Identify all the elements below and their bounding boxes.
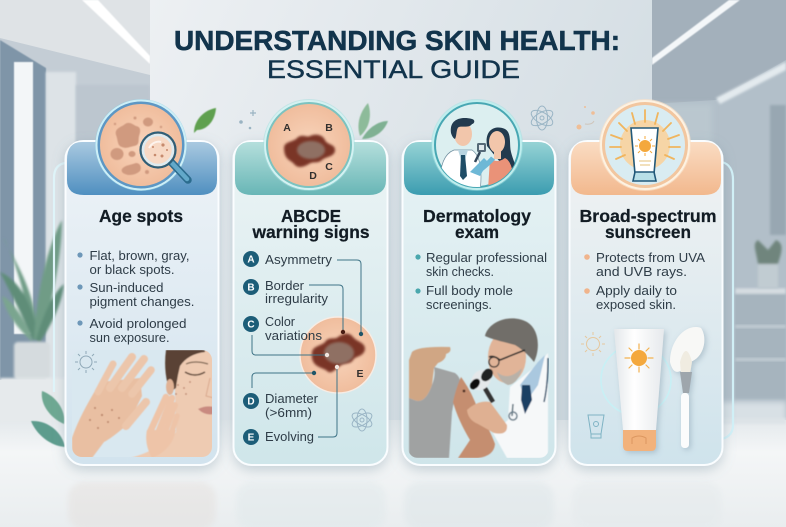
list: D diameter: (>6mm) bbox=[265, 405, 312, 420]
heading: ABCDE bbox=[281, 206, 341, 226]
list: D diameter: Diameter bbox=[265, 391, 319, 406]
connector lines bbox=[252, 260, 363, 437]
mole diagram: E bbox=[356, 368, 364, 380]
heading: exam bbox=[455, 222, 499, 242]
icon: small tube bbox=[588, 415, 604, 438]
heading: Age spots bbox=[99, 206, 183, 226]
list: E evolving: Evolving bbox=[265, 429, 314, 444]
photo: hand and face bbox=[72, 350, 214, 458]
card body bbox=[570, 141, 722, 465]
card reflections bbox=[68, 482, 722, 527]
illustration: brush with cream bbox=[670, 327, 704, 448]
icon: sunscreen tube with sun rays bbox=[599, 99, 691, 191]
icon: sparkles bbox=[239, 110, 256, 129]
list: B border: B bbox=[247, 282, 255, 294]
bullet list: Full body mole bbox=[426, 283, 513, 298]
icon: small sun bbox=[581, 332, 605, 356]
bullet list: screenings. bbox=[426, 297, 492, 312]
bullet list: Protects from UVA bbox=[596, 250, 705, 265]
heading: Broad-spectrum bbox=[580, 206, 716, 226]
bullet list: skin checks. bbox=[426, 264, 494, 279]
heading bbox=[252, 206, 370, 242]
card header band bbox=[571, 142, 721, 195]
panel: ABCDE warning signs bbox=[234, 99, 388, 465]
list: C color: Color bbox=[265, 314, 296, 329]
dermatoscope bbox=[467, 366, 495, 402]
list: A asymmetry: Asymmetry bbox=[265, 252, 333, 267]
list: C color: variations bbox=[265, 328, 323, 343]
icon: doctor and patient bbox=[431, 99, 523, 192]
icon: skin with spots and magnifier bbox=[95, 99, 188, 191]
hand on cheek bbox=[146, 397, 177, 458]
list: C color bbox=[243, 314, 323, 343]
list: D diameter bbox=[243, 391, 319, 420]
heading: sunscreen bbox=[605, 222, 691, 242]
bullet list: Regular professional bbox=[426, 250, 547, 265]
icon: leaf near age spots bbox=[193, 108, 216, 134]
icon: glow ring bbox=[601, 345, 671, 415]
icon: mole with ABCD letters: C bbox=[325, 161, 333, 173]
patient arm bbox=[453, 377, 495, 458]
gloved hands and scope bbox=[470, 158, 488, 176]
bullet list bbox=[77, 248, 194, 345]
mole diagram bbox=[300, 317, 376, 393]
plant bbox=[0, 220, 64, 380]
list: E evolving bbox=[243, 429, 314, 445]
heading: warning signs bbox=[252, 222, 370, 242]
title: UNDERSTANDING SKIN HEALTH: bbox=[174, 25, 620, 56]
list: D diameter: D bbox=[247, 396, 255, 408]
card header band bbox=[404, 142, 554, 195]
card header band bbox=[235, 142, 386, 195]
title: ESSENTIAL GUIDE bbox=[267, 56, 520, 84]
title bbox=[174, 25, 620, 84]
face bbox=[130, 350, 214, 458]
list: E evolving: E bbox=[248, 432, 255, 444]
card body bbox=[234, 141, 388, 465]
icon: mole with ABCD letters: B bbox=[325, 122, 333, 134]
list: A asymmetry: A bbox=[247, 254, 255, 266]
bullet list: Flat, brown, gray, bbox=[90, 248, 190, 263]
list: B border: Border bbox=[265, 278, 305, 293]
patient head and shoulders bbox=[409, 347, 450, 401]
doctor coat bbox=[493, 353, 548, 458]
floor bbox=[0, 420, 786, 527]
heading bbox=[580, 206, 716, 242]
panel: dermatology exam bbox=[402, 99, 556, 465]
card body bbox=[66, 141, 218, 465]
icon: sparkles warm bbox=[576, 106, 595, 130]
list: B border: irregularity bbox=[265, 291, 329, 306]
icon: atom bbox=[350, 409, 374, 431]
patient bbox=[487, 127, 516, 170]
card body bbox=[402, 141, 556, 465]
hand bbox=[72, 357, 151, 458]
magnifier bbox=[140, 132, 188, 180]
decorative side frame: left bbox=[54, 163, 65, 392]
icon: lower-left leaves bbox=[31, 391, 65, 447]
doctor hands bbox=[467, 402, 507, 434]
bullet list: pigment changes. bbox=[90, 294, 194, 309]
icon: mole with ABCD letters: A bbox=[283, 122, 291, 134]
wall panel bbox=[150, 0, 652, 420]
bullet list: exposed skin. bbox=[596, 297, 676, 312]
bullet list bbox=[584, 250, 705, 312]
list: B border bbox=[243, 278, 329, 306]
bullet list: or black spots. bbox=[90, 262, 174, 277]
bullet list: Avoid prolonged bbox=[90, 316, 186, 331]
bullet list: and UVB rays. bbox=[596, 264, 687, 279]
icon: small sun bbox=[75, 351, 97, 373]
list: C color: C bbox=[247, 320, 255, 330]
icon: leaves near ABCDE bbox=[358, 103, 388, 139]
card header band bbox=[67, 142, 217, 195]
decorative side frame: right bbox=[722, 162, 733, 439]
patient grey top bbox=[409, 367, 460, 458]
heading bbox=[423, 206, 531, 242]
doctor bbox=[441, 150, 482, 187]
panel: broad-spectrum sunscreen bbox=[570, 99, 722, 465]
panel: age spots bbox=[66, 99, 218, 465]
icon: mole with ABCD letters bbox=[263, 99, 355, 191]
bullet list: Apply daily to bbox=[596, 283, 677, 298]
doctor head bbox=[488, 338, 526, 383]
illustration: sunscreen tube bbox=[614, 329, 664, 451]
photo: doctor examining patient bbox=[409, 318, 548, 458]
heading: Dermatology bbox=[423, 206, 531, 226]
icon: mole with ABCD letters: D bbox=[309, 170, 317, 182]
bullet list: sun exposure. bbox=[90, 330, 170, 345]
bullet list bbox=[415, 250, 547, 312]
list: A asymmetry bbox=[243, 251, 333, 267]
icon: atom top bbox=[529, 106, 555, 130]
bullet list: Sun-induced bbox=[90, 280, 164, 295]
